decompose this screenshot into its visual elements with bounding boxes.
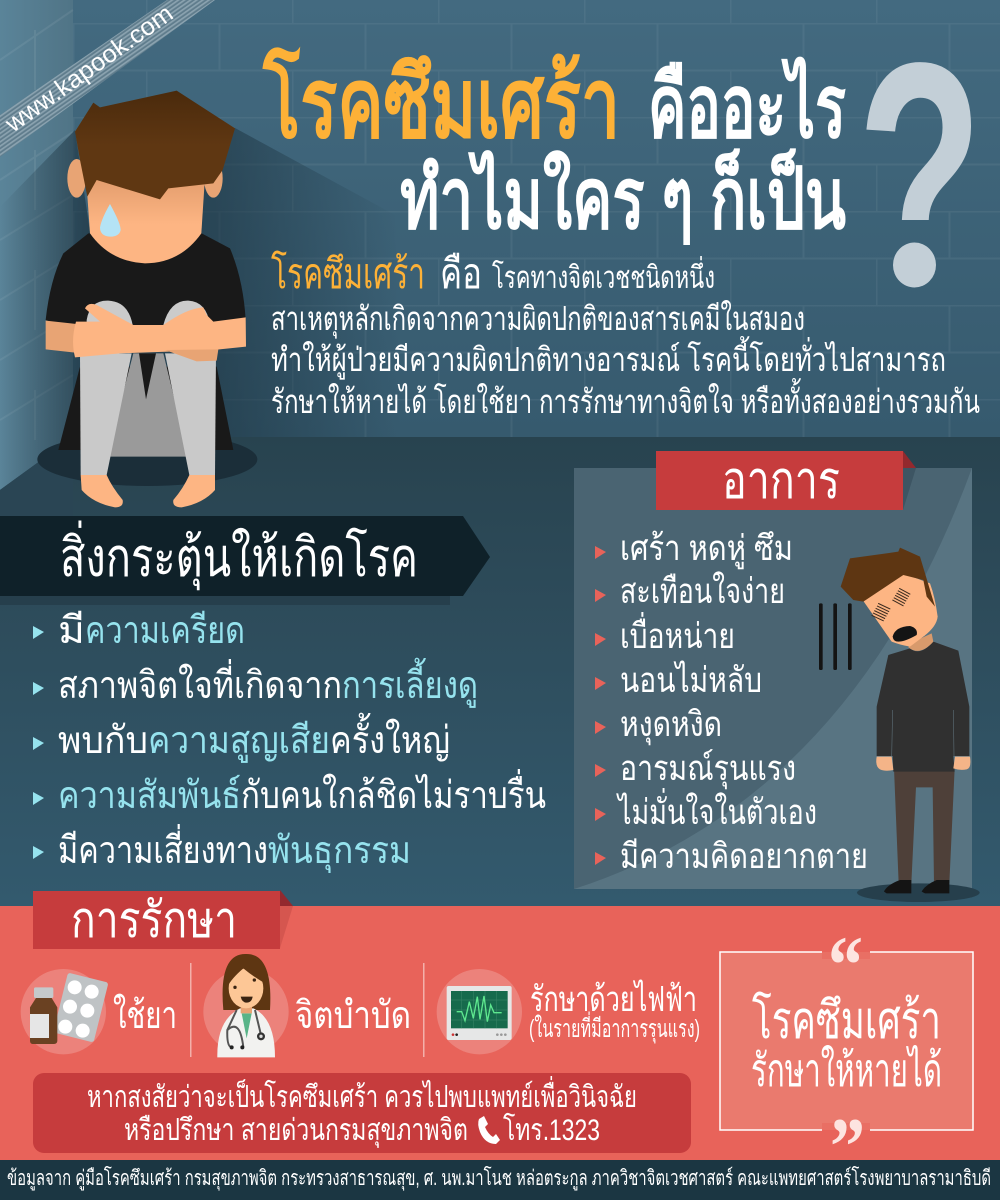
- question mark: [866, 62, 971, 288]
- treatment banner: การรักษา: [71, 892, 237, 948]
- list: symptoms: [595, 529, 868, 876]
- list: triggers: ความสูญเสีย: [148, 720, 330, 763]
- list: symptoms: เบื่อหน่าย: [620, 612, 735, 656]
- website ribbon: www.kapook.com: [0, 0, 178, 138]
- callout: hotline: หากสงสัยว่าจะเป็นโรคซึมเศร้า ควรไปพบแพทย์เพื่อวินิจฉัย: [87, 1076, 637, 1114]
- label: electric treatment: รักษาด้วยไฟฟ้า: [530, 979, 697, 1019]
- list: triggers: [33, 610, 546, 873]
- depressed standing man illustration: [819, 548, 980, 902]
- title: คืออะไร: [648, 57, 846, 156]
- list: symptoms: สะเทือนใจง่าย: [620, 571, 785, 611]
- panel: treatment background: [0, 906, 1000, 1160]
- label: medicine: ใช้ยา: [113, 994, 177, 1037]
- floor background: [0, 437, 1000, 906]
- label: electric treatment: [529, 979, 700, 1044]
- callout: quote: [720, 919, 973, 1192]
- panel: symptoms: [574, 468, 972, 889]
- definition paragraph: สาเหตุหลักเกิดจากความผิดปกติของสารเคมีในสมอง: [271, 300, 805, 339]
- symptoms banner: อาการ: [722, 452, 840, 510]
- title: [262, 47, 846, 247]
- icon: medicine: [21, 969, 108, 1054]
- list: symptoms: มีความคิดอยากตาย: [620, 837, 868, 876]
- footer source: [0, 1160, 1000, 1200]
- list: triggers: สภาพจิตใจที่เกิดจาก: [58, 659, 342, 707]
- list: triggers: พบกับ: [58, 720, 148, 762]
- callout: hotline: โทร.1323: [503, 1112, 600, 1147]
- list: triggers: มี: [58, 610, 85, 652]
- list: symptoms: หงุดหงิด: [620, 705, 722, 745]
- callout: quote: “: [828, 919, 863, 1010]
- list: symptoms: อารมณ์รุนแรง: [620, 749, 796, 789]
- definition paragraph: โรคซึมเศร้า: [271, 249, 425, 297]
- list: symptoms: เศร้า หดหู่ ซึม: [620, 529, 793, 569]
- title: โรคซึมเศร้า: [262, 47, 620, 158]
- symptoms banner: [656, 451, 916, 510]
- callout: hotline: [33, 1073, 691, 1153]
- callout: quote: ”: [830, 1101, 865, 1192]
- list: symptoms: นอนไม่หลับ: [620, 660, 762, 700]
- background wall: [0, 0, 1000, 490]
- definition paragraph: โรคทางจิตเวชชนิดหนึ่ง: [492, 256, 715, 295]
- question mark: ?: [857, 0, 983, 356]
- callout: hotline: หรือปรึกษา สายด่วนกรมสุขภาพจิต: [124, 1114, 468, 1149]
- definition paragraph: [271, 249, 980, 420]
- panel: triggers heading: [0, 516, 490, 605]
- list: triggers: ความสัมพันธ์: [58, 774, 241, 817]
- label: electric treatment: (ในรายที่มีอาการรุนแรง): [529, 1011, 700, 1044]
- list: symptoms: ไม่มั่นใจในตัวเอง: [616, 788, 817, 832]
- sad sitting man illustration: [37, 91, 257, 507]
- list: triggers: ครั้งใหญ่: [330, 712, 450, 762]
- label: therapy: จิตบำบัด: [295, 995, 411, 1037]
- list: triggers: กับคนใกล้ชิดไม่ราบรื่น: [241, 769, 546, 817]
- panel: triggers heading: สิ่งกระตุ้นให้เกิดโรค: [60, 520, 418, 591]
- icon: monitor: [437, 969, 522, 1054]
- list: triggers: พันธุกรรม: [268, 830, 411, 873]
- list: triggers: การเลี้ยงดู: [342, 657, 478, 708]
- icon: doctor: [203, 954, 289, 1057]
- definition paragraph: คือ: [440, 250, 482, 297]
- list: triggers: ความเครียด: [85, 610, 245, 652]
- list: triggers: มีความเสี่ยงทาง: [58, 824, 268, 872]
